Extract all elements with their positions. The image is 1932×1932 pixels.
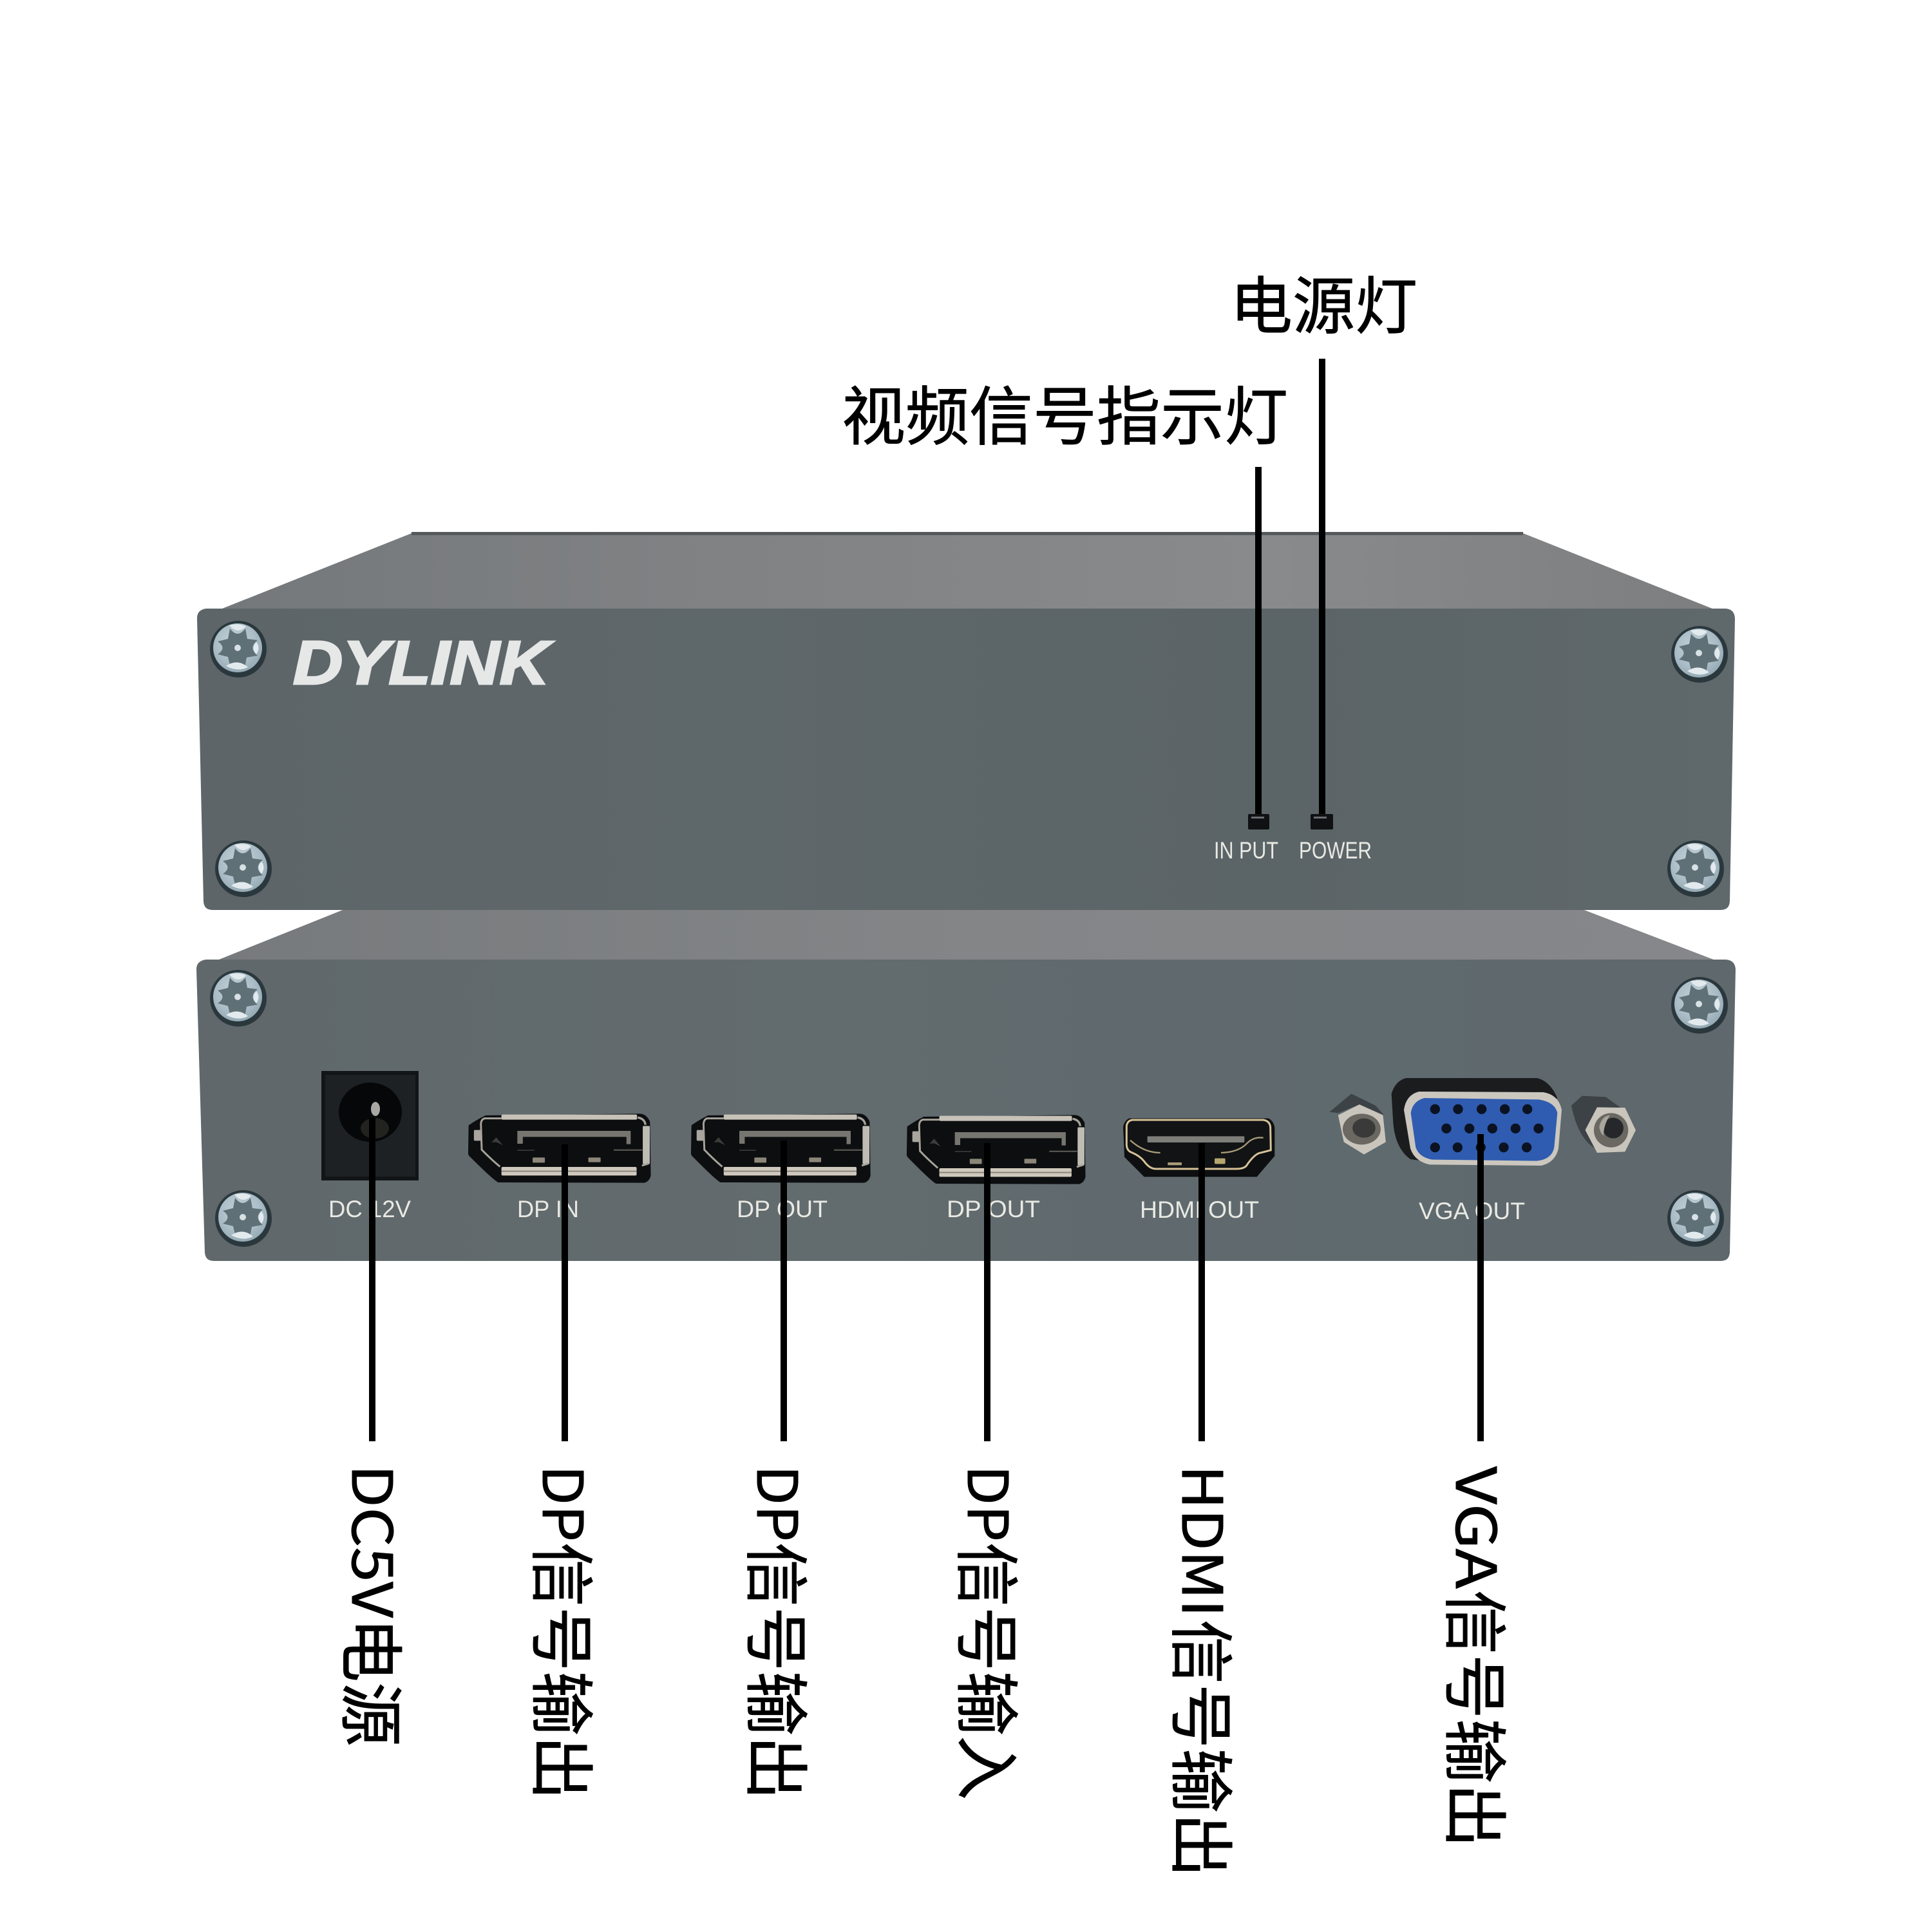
screw: rear top right	[1671, 977, 1728, 1034]
rotated label: VGA signal output: VGA	[1440, 1466, 1520, 1589]
rotated label: VGA signal output: 信号输出	[1433, 1590, 1526, 1848]
rotated label: HDMI signal output: HDMI	[1166, 1465, 1247, 1617]
label: power light: 电源灯	[1230, 256, 1417, 346]
leader line: HDMI	[1198, 1143, 1205, 1441]
VGA left standoff nut	[1329, 1094, 1386, 1155]
rotated label: DP signal output: 信号输出	[734, 1542, 828, 1800]
screw: top right	[1671, 626, 1728, 683]
port text: DP OUT: DP OUT	[737, 1196, 828, 1222]
leader line: DP out 2	[984, 1143, 990, 1441]
rotated label: DC5V power	[329, 1464, 422, 1747]
DC power jack	[321, 1071, 419, 1180]
rotated label: HDMI signal output: 信号输出	[1159, 1620, 1253, 1877]
screw: rear bottom left	[215, 1190, 272, 1247]
VGA dark housing	[1392, 1078, 1557, 1164]
device: rear view	[196, 910, 1736, 1261]
label: video signal indicator light: 视频信号指示灯	[842, 365, 1288, 458]
VGA blue insert	[1411, 1098, 1557, 1161]
panel text: IN PUT: IN PUT	[1214, 837, 1278, 864]
port text: DP OUT: DP OUT	[947, 1196, 1040, 1222]
port text: VGA OUT: VGA OUT	[1419, 1198, 1525, 1224]
leader line: DC power	[369, 1118, 375, 1441]
port text: HDMI OUT: HDMI OUT	[1140, 1197, 1259, 1223]
DP port: DP IN	[468, 1113, 651, 1183]
LED: power	[1311, 814, 1333, 829]
rotated label: DP signal output: 信号输出	[520, 1542, 613, 1800]
screw: rear bottom right	[1667, 1190, 1724, 1247]
front unit top face	[216, 532, 1719, 611]
LED: input	[1248, 814, 1269, 829]
rotated label: DC5V power: DC5V	[336, 1464, 417, 1618]
leader line: DP out 1	[781, 1141, 787, 1441]
VGA metal shell	[1404, 1092, 1562, 1166]
port text: DC 12V: DC 12V	[328, 1196, 411, 1222]
leader line: DP in	[562, 1144, 568, 1441]
DP port: DP OUT 2	[907, 1115, 1086, 1184]
screw: bottom left	[215, 840, 272, 897]
rear unit top face	[216, 910, 1717, 961]
leader line: VGA	[1477, 1134, 1484, 1441]
DP port: DP OUT 1	[691, 1113, 871, 1183]
leader line: video signal light	[1255, 467, 1262, 814]
front unit front panel	[197, 609, 1735, 910]
device: front view	[197, 532, 1735, 910]
DYLINK logo: DYLINK	[293, 629, 554, 697]
screw: top left	[210, 621, 267, 677]
rotated label: DP signal output: DP	[741, 1465, 822, 1542]
rotated label: VGA signal output	[1433, 1466, 1526, 1848]
rotated label: HDMI signal output	[1159, 1465, 1253, 1877]
rotated label: DP signal input: DP	[952, 1465, 1032, 1542]
leader line: power light	[1319, 359, 1325, 814]
rotated label: DC5V power: 电源	[329, 1618, 422, 1747]
panel text: POWER: POWER	[1299, 837, 1372, 864]
port text: DP IN: DP IN	[517, 1196, 579, 1222]
screw: rear top left	[210, 970, 267, 1027]
screw: bottom right	[1667, 840, 1724, 897]
rear unit back panel	[196, 960, 1736, 1261]
rotated label: DP signal output: DP	[527, 1465, 607, 1542]
VGA port	[1392, 1078, 1562, 1166]
VGA right standoff nut	[1571, 1096, 1636, 1153]
rotated label: DP signal input: 信号输入	[945, 1542, 1038, 1800]
HDMI port	[1123, 1119, 1274, 1177]
